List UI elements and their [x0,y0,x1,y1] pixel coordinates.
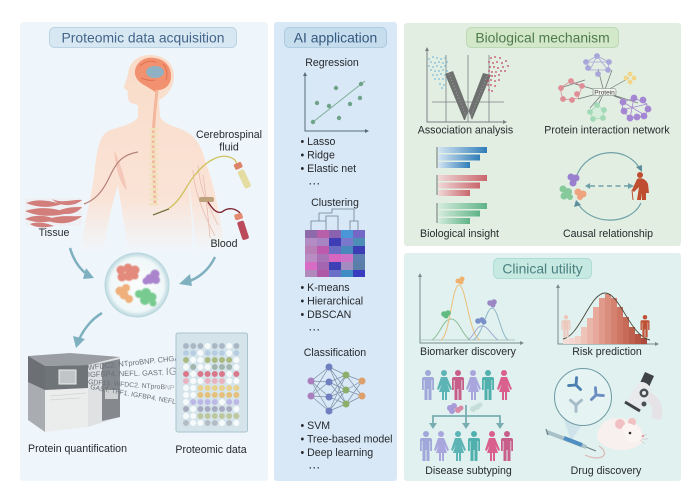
histogram: risk prediction [556,284,659,346]
panel: clinical utility [404,253,681,481]
mouse [585,418,648,458]
drug discovery illustration [546,368,662,458]
density chart: biomarker discovery [418,273,524,345]
list: classification methods: • SVM [300,420,330,432]
label: risk prediction: Risk prediction [572,346,642,358]
protein: red [116,264,140,282]
label: biological insight: Biological insight [420,228,499,240]
label: causal relationship: Causal relationship [563,228,653,240]
list: regression methods: • Lasso [300,136,335,148]
label: biomarker discovery: Biomarker discovery [420,346,517,358]
proteomic data well plate [176,333,248,432]
icon: brain [135,58,171,92]
label: protein quantification: Protein quantification [28,443,127,455]
list: clustering methods: • K-means [300,282,350,294]
protein: orange [574,188,586,200]
list: regression methods: … [308,173,320,187]
tissue sampling line [84,152,138,204]
icon: blood tube [234,212,250,241]
people: subtypes [420,431,513,461]
protein: purple [568,174,580,186]
protein name stream: IGFBP4. NEFL. GAST. IGFBP [88,365,197,380]
label: drug discovery: Drug discovery [571,465,642,477]
label: proteomic data: Proteomic data [175,444,247,456]
panel: ai application [274,22,397,481]
protein: purple [142,270,160,284]
heading: clinical utility: Clinical utility [502,260,583,276]
syringe [546,429,596,451]
protein: orange [456,276,464,284]
blood draw line and band [199,197,240,213]
arrow: proteins to quantification [73,313,102,348]
list: regression methods: • Elastic net [300,163,356,175]
protein: orange [116,284,133,303]
causal relationship diagram [560,153,649,220]
protein interaction network [558,54,651,122]
microscope [625,372,662,420]
arrow: tissue to proteins [70,248,94,279]
label: disease subtyping: Disease subtyping [425,465,512,477]
branching arrows [429,405,504,429]
heading: proteomic data acquisition [50,28,236,48]
cluster: violet [620,95,651,121]
label: association analysis: Association analysis [418,124,513,136]
label: cerebrospinal fluid: fluid [219,142,239,154]
sphere of proteins [104,252,170,318]
icon: elderly person [632,172,649,200]
volcano plot: association analysis [425,47,509,124]
protein: purple [487,299,497,308]
label: blood: Blood [210,238,238,250]
heading: clinical utility [494,258,592,278]
people: mixed cohort [422,370,512,400]
arrow: blood to proteins [179,257,215,286]
protein: green [135,288,156,306]
protein name stream: GDF15. WFDC2. NTproBNP [88,379,175,392]
icon: cerebrospinal fluid tube [233,161,252,189]
label: protein interaction network: Protein interaction network [544,124,670,136]
list: classification methods: … [308,457,320,471]
label: regression: Regression [305,57,359,69]
list: clustering methods: • Hierarchical [300,295,363,307]
clustering heatmap with dendrogram [305,209,365,277]
list: classification methods: • Deep learning [300,447,373,459]
heading: proteomic data acquisition: Proteomic data acquisition [62,30,224,46]
protein: green [560,186,573,200]
icon: low risk person [562,315,570,338]
heading: ai application: AI application [294,30,377,46]
protein: blue [475,317,486,324]
label: cerebrospinal fluid: Cerebrospinal [196,129,262,141]
cluster: pink [558,78,584,102]
panel: biological mechanism [404,23,681,246]
label: clustering: Clustering [311,197,359,209]
list: clustering methods: • DBSCAN [300,309,351,321]
spine [153,90,157,208]
bar chart: biological insight [437,147,487,224]
label: tissue: Tissue [39,227,70,239]
cluster: yellow [624,72,636,84]
cluster: green [588,102,606,122]
list: regression methods: • Ridge [300,149,335,161]
mass spectrometer [28,353,120,432]
disease subtyping diagram [420,370,513,461]
human body illustration [80,55,252,252]
cluster: purple [584,54,612,76]
icon: tissue fibres [25,198,82,227]
regression chart [303,72,369,133]
list: classification methods: • Tree-based model [300,433,393,445]
protein name stream: WFDC2. NTproBNP. CHGA. CCL [87,350,204,373]
heading: biological mechanism: Biological mechanism [475,30,610,46]
protein name stream [87,350,204,408]
protein name stream: GAST. TFF1. IGFBP4. NEFL. G [90,384,185,408]
heading: ai application [284,28,386,48]
neural network diagram [308,364,366,414]
panel: proteomic data acquisition [20,22,268,481]
protein: green [441,310,451,318]
protein markers [447,402,482,414]
label: classification: Classification [304,347,366,359]
list: clustering methods: … [308,319,320,333]
magnifier circle with antibodies [554,368,612,441]
cerebrospinal fluid catheter [153,156,237,215]
node: protein: Protein [594,90,615,96]
icon: high risk person [640,315,650,338]
